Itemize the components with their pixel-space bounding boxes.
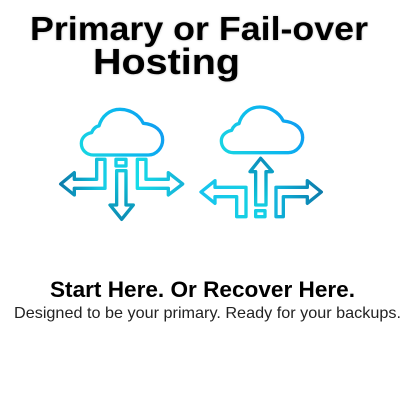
left arrow <box>201 181 246 217</box>
heading: Start Here. Or Recover Here.: Start Here. Or Recover Here. <box>50 277 355 302</box>
small square <box>116 159 126 166</box>
cloud outline <box>81 109 163 155</box>
right arrow <box>137 159 183 195</box>
right arrow <box>276 181 321 217</box>
up arrow <box>250 158 272 205</box>
title: Hosting: Hosting <box>93 41 240 82</box>
down arrow <box>110 171 133 219</box>
subheading: Designed to be your primary. Ready for your backups. <box>14 305 401 322</box>
icon: cloud with incoming arrows <box>201 107 321 217</box>
title: Primary or Fail-over: Primary or Fail-over <box>30 10 368 47</box>
icon: cloud with outgoing arrows <box>61 109 183 219</box>
cloud outline <box>221 107 303 153</box>
small square <box>256 211 265 217</box>
left arrow <box>61 159 105 195</box>
